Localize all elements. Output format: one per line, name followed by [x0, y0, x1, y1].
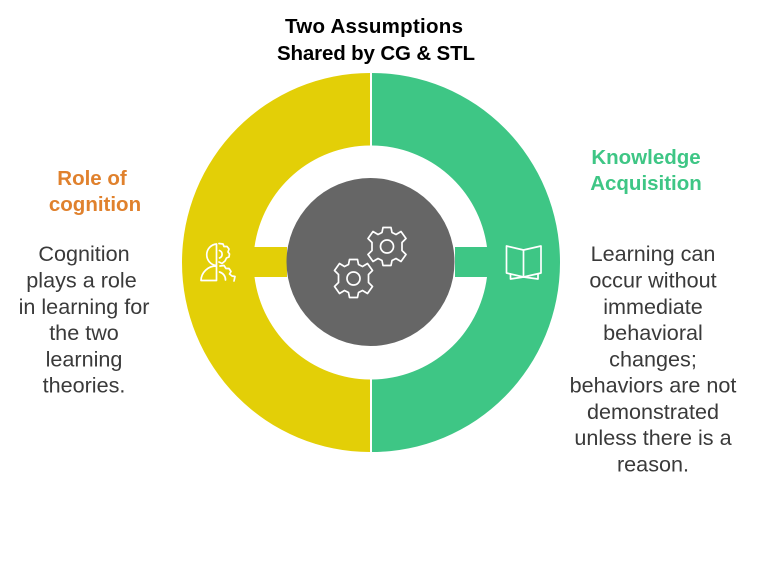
left heading: cognition [49, 193, 141, 216]
right body text: demonstrated [587, 399, 719, 424]
icon: open book [506, 246, 541, 279]
left heading: Role of [57, 167, 127, 190]
right body text: immediate [603, 294, 703, 319]
title: Shared by CG & STL [277, 42, 475, 65]
right body text: unless there is a [574, 425, 733, 450]
left body text: learning [46, 346, 122, 372]
right body text [570, 241, 736, 476]
icon: gears [334, 228, 406, 298]
right heading: Acquisition [590, 172, 702, 195]
icon: lower gear [334, 260, 372, 298]
right body text: occur without [589, 268, 717, 292]
title: Two Assumptions [285, 15, 463, 38]
left body text: theories. [43, 372, 125, 398]
left body text: Cognition [38, 241, 130, 266]
left body text: the two [49, 320, 119, 345]
right body text: changes; [609, 346, 697, 372]
right body text: reason. [617, 452, 689, 476]
right body text: behaviors are not [570, 372, 736, 398]
panel: green half ring [372, 73, 560, 452]
right body text: behavioral [603, 320, 703, 345]
left body text: in learning for [19, 294, 149, 319]
left body text [19, 241, 149, 398]
icon: head with gears [201, 244, 235, 281]
left body text: plays a role [26, 268, 137, 292]
title [277, 15, 475, 65]
right heading [590, 146, 702, 195]
left heading [49, 167, 141, 216]
right body text: Learning can [591, 241, 715, 266]
panel: yellow half ring [182, 73, 370, 452]
right heading: Knowledge [591, 146, 701, 169]
center circle [286, 178, 454, 346]
icon: upper gear [368, 228, 406, 266]
